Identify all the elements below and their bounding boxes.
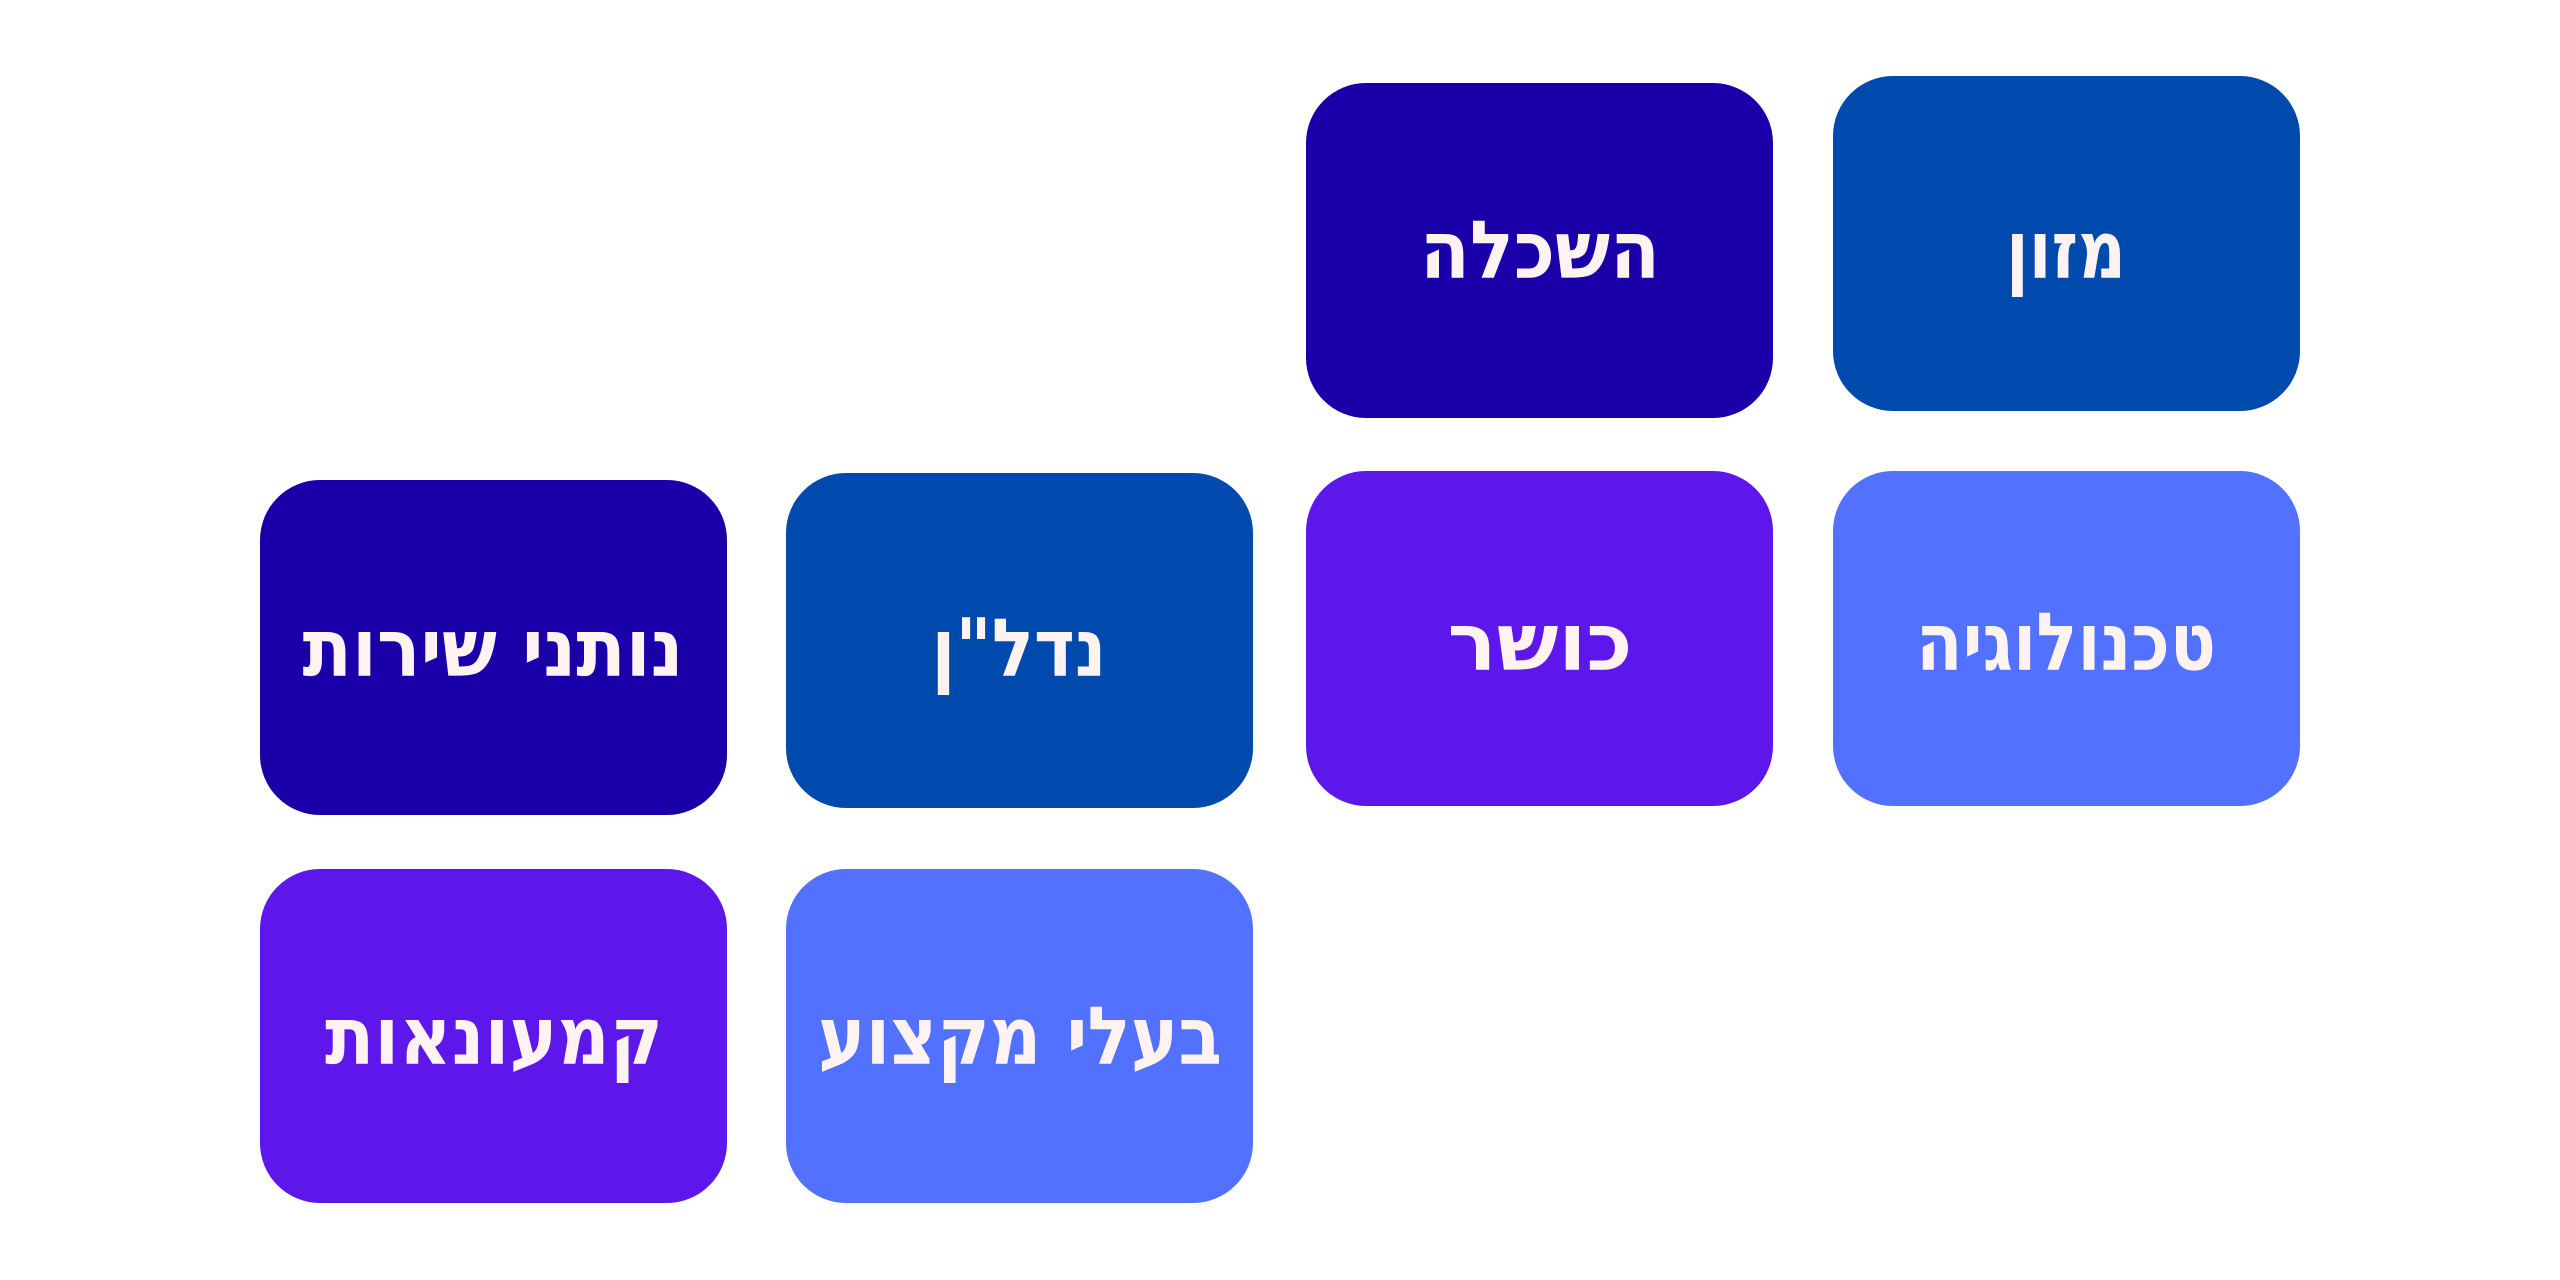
label: fitness: כושר	[1448, 596, 1632, 689]
panel: technology	[1833, 471, 2300, 806]
panel: real estate	[786, 473, 1253, 808]
panel: food	[1833, 76, 2300, 411]
label: food: מזון	[2006, 204, 2126, 297]
panel: professionals	[786, 869, 1253, 1203]
label: real estate: נדל"ן	[932, 602, 1106, 695]
panel: retailers	[260, 869, 727, 1203]
label: education: השכלה	[1420, 204, 1660, 297]
label: service providers: נותני שירות	[302, 602, 684, 695]
panel: education	[1306, 83, 1773, 418]
panel: fitness	[1306, 471, 1773, 806]
label: retailers: קמעונאות	[325, 990, 663, 1083]
panel: service providers	[260, 480, 727, 815]
label: professionals: בעלי מקצוע	[818, 990, 1222, 1083]
label: technology: טכנולוגיה	[1916, 596, 2216, 689]
